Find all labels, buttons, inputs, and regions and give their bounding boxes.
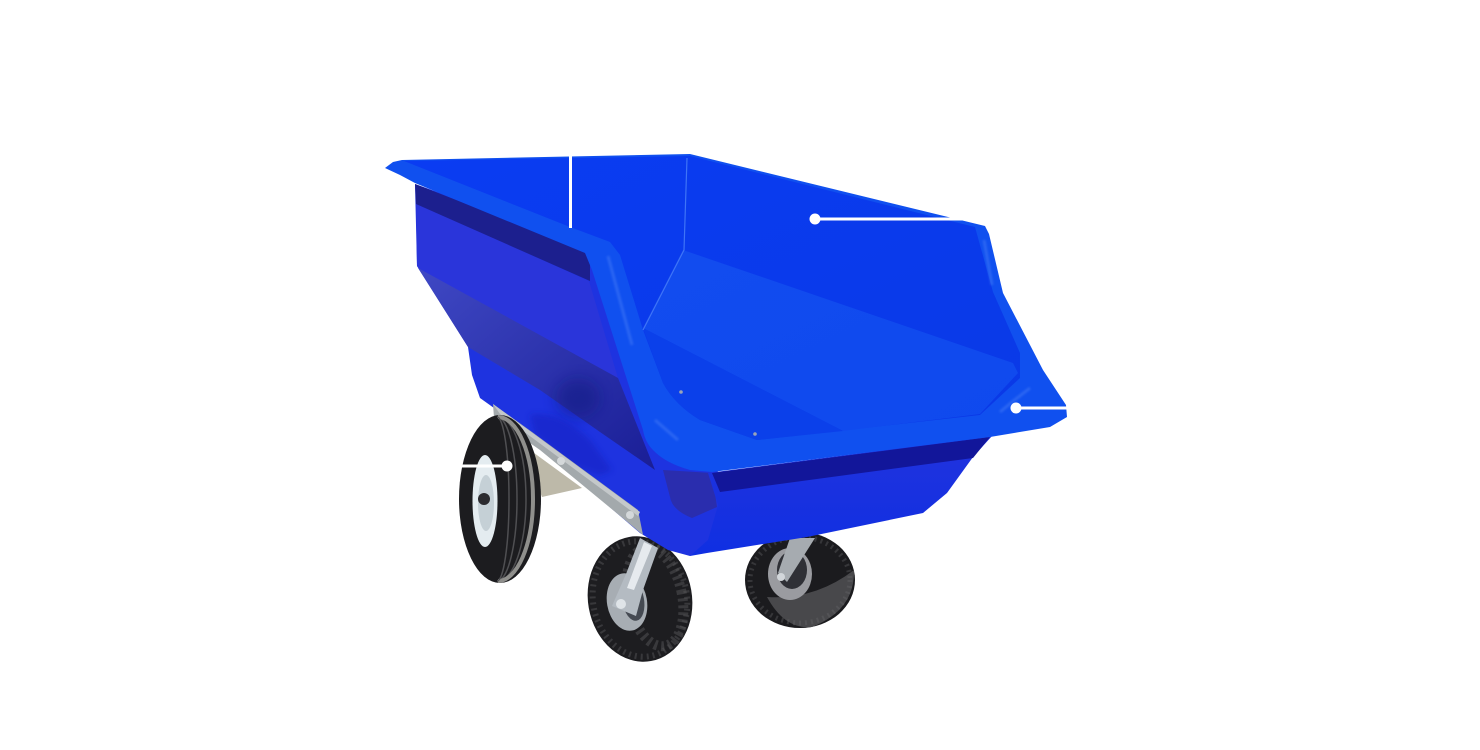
grey dark band (418, 268, 655, 470)
far caster wheel (right) (745, 532, 855, 628)
callout: right handle leader line with dot (1010, 402, 1068, 414)
tub floor (643, 250, 1018, 431)
dark band under left rim (415, 184, 590, 281)
trough at front of floor (643, 328, 843, 440)
callout: wheel leader line with dot (459, 460, 512, 472)
shadow on band (556, 378, 600, 418)
callout: back wall leader line with dot (810, 214, 963, 224)
back wall (404, 156, 1020, 440)
back corner crease (643, 158, 687, 330)
callout: top left leader line (569, 156, 572, 228)
tub: rim and interior (385, 154, 1067, 472)
front caster wheel tyre (centre) (578, 528, 702, 670)
lower wall reflection (530, 414, 612, 475)
left outer wall base (415, 184, 727, 556)
rim silhouette (385, 154, 1067, 472)
corner pocket shadow (663, 470, 717, 518)
rear wheel (left) (459, 415, 541, 583)
steel chassis frame (493, 404, 643, 535)
dark front band under rim (712, 437, 990, 492)
front caster fork (612, 538, 658, 616)
rim highlights (608, 240, 1030, 440)
tub: outer body (415, 184, 992, 556)
front underside (690, 436, 992, 556)
upper mid band (416, 203, 618, 378)
rivets (679, 390, 683, 394)
